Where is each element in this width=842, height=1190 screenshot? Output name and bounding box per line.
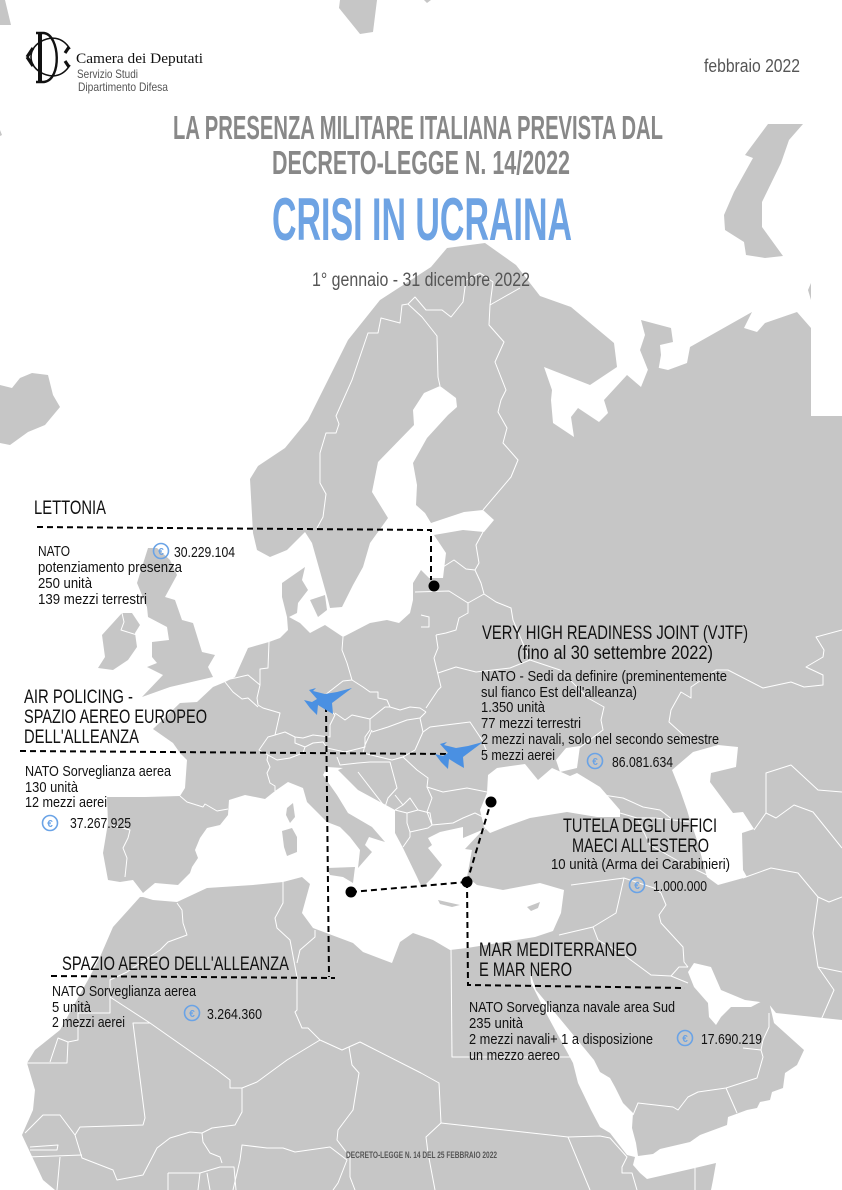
panel: VJTF: €: [592, 757, 598, 768]
panel: Spazio aereo dell'Alleanza: €: [189, 1009, 195, 1020]
panel: VJTF: NATO - Sedi da definire (preminentemente: [481, 668, 727, 685]
panel: VJTF: VERY HIGH READINESS JOINT (VJTF): [482, 622, 748, 644]
panel: Spazio aereo dell'Alleanza: 3.264.360: [207, 1006, 262, 1023]
panel: Mar Mediterraneo e Mar Nero: 17.690.219: [701, 1031, 762, 1048]
panel: Lettonia: potenziamento presenza: [38, 559, 183, 576]
panel: Mar Mediterraneo e Mar Nero: MAR MEDITERRANEO: [479, 939, 637, 961]
Caspian Sea: [672, 745, 754, 885]
panel: Lettonia: LETTONIA: [34, 497, 106, 519]
panel: Tutela degli uffici: 10 unità (Arma dei Carabinieri): [551, 856, 730, 873]
panel: Tutela degli uffici: TUTELA DEGLI UFFICI: [563, 815, 717, 837]
panel: VJTF: 86.081.634: [612, 754, 673, 771]
route lines: [20, 527, 685, 988]
country borders: [25, 273, 842, 1190]
panel: Lettonia: 30.229.104: [174, 544, 235, 561]
panel: Air Policing: DELL'ALLEANZA: [24, 726, 139, 748]
panel: VJTF: (fino al 30 settembre 2022): [517, 642, 713, 664]
panel: VJTF: 77 mezzi terrestri: [481, 715, 581, 732]
panel: VJTF: 2 mezzi navali, solo nel secondo semestre: [481, 731, 719, 748]
panel: Air Policing: 37.267.925: [70, 815, 131, 832]
panel: Tutela degli uffici: [551, 815, 730, 895]
icon: jet over Germany: [304, 688, 352, 715]
panel: Mar Mediterraneo e Mar Nero: [469, 939, 762, 1064]
panel: Spazio aereo dell'Alleanza: 2 mezzi aerei: [52, 1014, 125, 1031]
logo text: Camera dei Deputati: Camera dei Deputati: [76, 51, 203, 67]
panel: Mar Mediterraneo e Mar Nero: 235 unità: [469, 1015, 524, 1032]
panel: Mar Mediterraneo e Mar Nero: E MAR NERO: [479, 959, 572, 981]
panel: Lettonia: €: [158, 547, 164, 558]
logo text: Camera dei Deputati: Servizio Studi: [77, 67, 138, 81]
period: 1° gennaio - 31 dicembre 2022: [312, 270, 530, 291]
panel: Mar Mediterraneo e Mar Nero: un mezzo aereo: [469, 1047, 560, 1064]
panel: Lettonia: [34, 497, 235, 608]
panel: VJTF: sul fianco Est dell'alleanza): [481, 684, 637, 701]
logo text: Camera dei Deputati: [76, 51, 203, 94]
panel: Tutela degli uffici: 1.000.000: [653, 878, 707, 895]
panel: Spazio aereo dell'Alleanza: [52, 953, 289, 1031]
panel: VJTF: 1.350 unità: [481, 699, 546, 716]
icon: jet over Romania: [435, 742, 483, 769]
panel: Air Policing: €: [47, 819, 53, 830]
footer: decree reference: DECRETO-LEGGE N. 14 DEL 25 FEBBRAIO 2022: [346, 1150, 497, 1160]
panel: Air Policing: [24, 686, 207, 832]
panel: Air Policing: NATO Sorveglianza aerea: [25, 763, 172, 780]
panel: Lettonia: 250 unità: [38, 575, 93, 592]
panel: Tutela degli uffici: €: [634, 881, 640, 892]
heading: Crisi in Ucraina: CRISI IN UCRAINA: [272, 186, 572, 253]
panel: Air Policing: SPAZIO AEREO EUROPEO: [24, 706, 207, 728]
panel: Lettonia: 139 mezzi terrestri: [38, 591, 147, 608]
panel: VJTF: [481, 622, 748, 771]
panel: Mar Mediterraneo e Mar Nero: 2 mezzi navali+ 1 a disposizione: [469, 1031, 653, 1048]
logo: Camera dei Deputati monogram: [27, 33, 70, 82]
Black Sea: [480, 764, 620, 833]
title: DECRETO-LEGGE N. 14/2022: [272, 144, 570, 181]
panel: Mar Mediterraneo e Mar Nero: NATO Sorveglianza navale area Sud: [469, 999, 675, 1016]
panel: Air Policing: 12 mezzi aerei: [25, 794, 107, 811]
panel: VJTF: 5 mezzi aerei: [481, 747, 555, 764]
panel: Tutela degli uffici: MAECI ALL'ESTERO: [572, 835, 709, 857]
panel: Spazio aereo dell'Alleanza: 5 unità: [52, 999, 92, 1016]
panel: Air Policing: 130 unità: [25, 779, 79, 796]
panel: Mar Mediterraneo e Mar Nero: €: [682, 1034, 688, 1045]
panel: Air Policing: AIR POLICING -: [24, 686, 133, 708]
Sea of Azov: [556, 746, 580, 772]
title: [173, 109, 663, 181]
date: febbraio 2022: febbraio 2022: [704, 56, 800, 76]
panel: Lettonia: NATO: [38, 543, 70, 560]
location markers: [346, 580, 496, 898]
panel: Spazio aereo dell'Alleanza: NATO Sorveglianza aerea: [52, 983, 197, 1000]
panel: Spazio aereo dell'Alleanza: SPAZIO AEREO DELL'ALLEANZA: [62, 953, 289, 975]
logo text: Camera dei Deputati: Dipartimento Difesa: [78, 80, 168, 94]
